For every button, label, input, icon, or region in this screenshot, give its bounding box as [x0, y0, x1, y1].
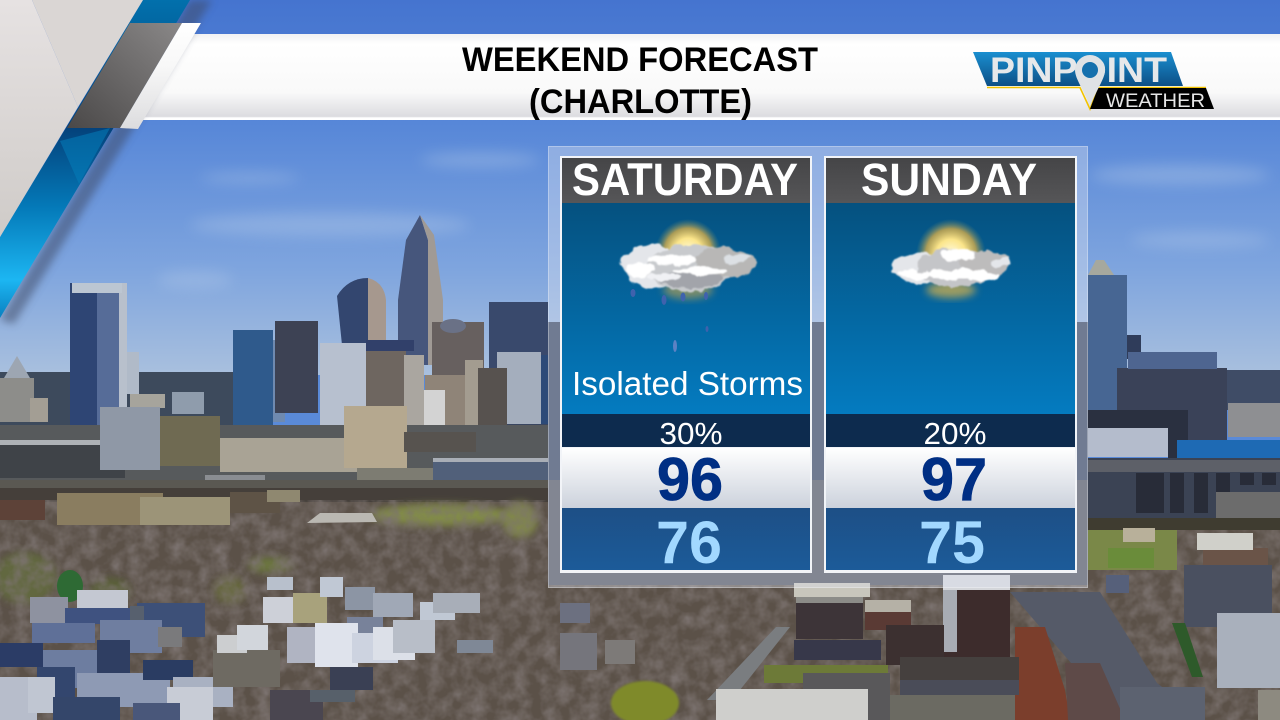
Saturday precipitation chance [562, 414, 810, 451]
lower right city blocks [560, 528, 1280, 720]
forecast glass panel [548, 146, 1088, 588]
Sunday heading: SUNDAY [861, 154, 1037, 205]
panel: Saturday [560, 154, 812, 576]
Sunday precipitation chance: 20% [924, 416, 986, 451]
tree canopy ground [0, 480, 1280, 720]
Sunday low temperature: 75 [919, 509, 985, 576]
distant horizon [0, 372, 240, 432]
logo: Pinpoint Weather [973, 51, 1214, 112]
Saturday high temperature [562, 446, 810, 513]
logo black plate [1090, 88, 1214, 109]
title: WEEKEND FORECAST [462, 41, 818, 79]
left skyline towers [0, 215, 548, 460]
logo blue plate [973, 52, 1183, 86]
Sunday low temperature [826, 508, 1075, 576]
Sunday high temperature: 97 [921, 446, 987, 513]
Saturday condition text: Isolated Storms [572, 365, 803, 402]
panel: Sunday [824, 154, 1077, 576]
Saturday low temperature: 76 [656, 509, 722, 576]
logo wordmark: PINPOINT [990, 51, 1167, 90]
icon: sun behind storm cloud [622, 219, 755, 352]
corner graphic: angled shards [0, 0, 212, 324]
light shards [0, 0, 78, 237]
logo weather word: WEATHER [1106, 90, 1205, 112]
icon: sun behind cloud [890, 219, 1013, 298]
Saturday high temperature: 96 [657, 446, 723, 513]
Saturday low temperature [562, 508, 810, 576]
blue band [0, 0, 190, 318]
Sunday sky panel [826, 203, 1075, 414]
icon: rain drops [630, 289, 708, 352]
Saturday heading: SATURDAY [572, 154, 798, 205]
Saturday sky panel [562, 203, 810, 414]
logo yellow rule [987, 88, 1206, 109]
title [462, 41, 818, 121]
sky [0, 0, 1280, 375]
right skyline and stadium [1088, 260, 1280, 530]
Saturday precipitation chance: 30% [660, 416, 722, 451]
Sunday precipitation chance [826, 414, 1075, 451]
icon: map pin [1075, 55, 1105, 107]
header bar [137, 34, 1280, 120]
buildings hidden behind panel [548, 322, 1088, 522]
mid-ground low buildings and road [0, 406, 548, 496]
Sunday high temperature [826, 446, 1075, 513]
white parallelogram [120, 23, 201, 129]
gray parallelogram [67, 23, 182, 128]
houses lower left [0, 577, 493, 720]
title: (CHARLOTTE) [529, 83, 752, 121]
